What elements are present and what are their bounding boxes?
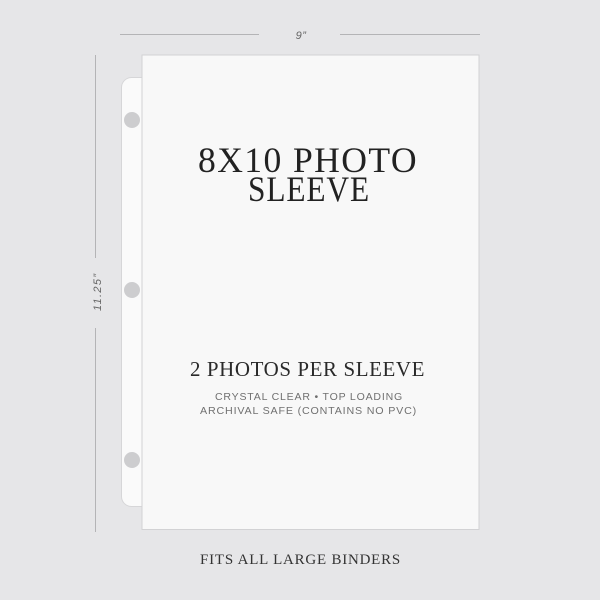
feature list: CRYSTAL CLEAR • TOP LOADING: [215, 391, 403, 403]
height dimension: 11.25 inches: 11.25”: [92, 273, 104, 311]
photos per sleeve heading: 2 PHOTOS PER SLEEVE: [190, 357, 425, 381]
photo sleeve panel: [142, 55, 479, 530]
binder strip with punched holes: [122, 78, 152, 506]
footer note: FITS ALL LARGE BINDERS: [200, 552, 401, 568]
width dimension: 9 inches: 9”: [296, 30, 307, 42]
feature list: [200, 391, 417, 417]
hole: top: [124, 112, 140, 128]
hole: middle: [124, 282, 140, 298]
sleeve title: SLEEVE: [248, 169, 370, 209]
feature list: ARCHIVAL SAFE (CONTAINS NO PVC): [200, 405, 417, 417]
hole: bottom: [124, 452, 140, 468]
sleeve title: [198, 140, 418, 209]
sleeve title: 8X10 PHOTO: [198, 140, 418, 180]
